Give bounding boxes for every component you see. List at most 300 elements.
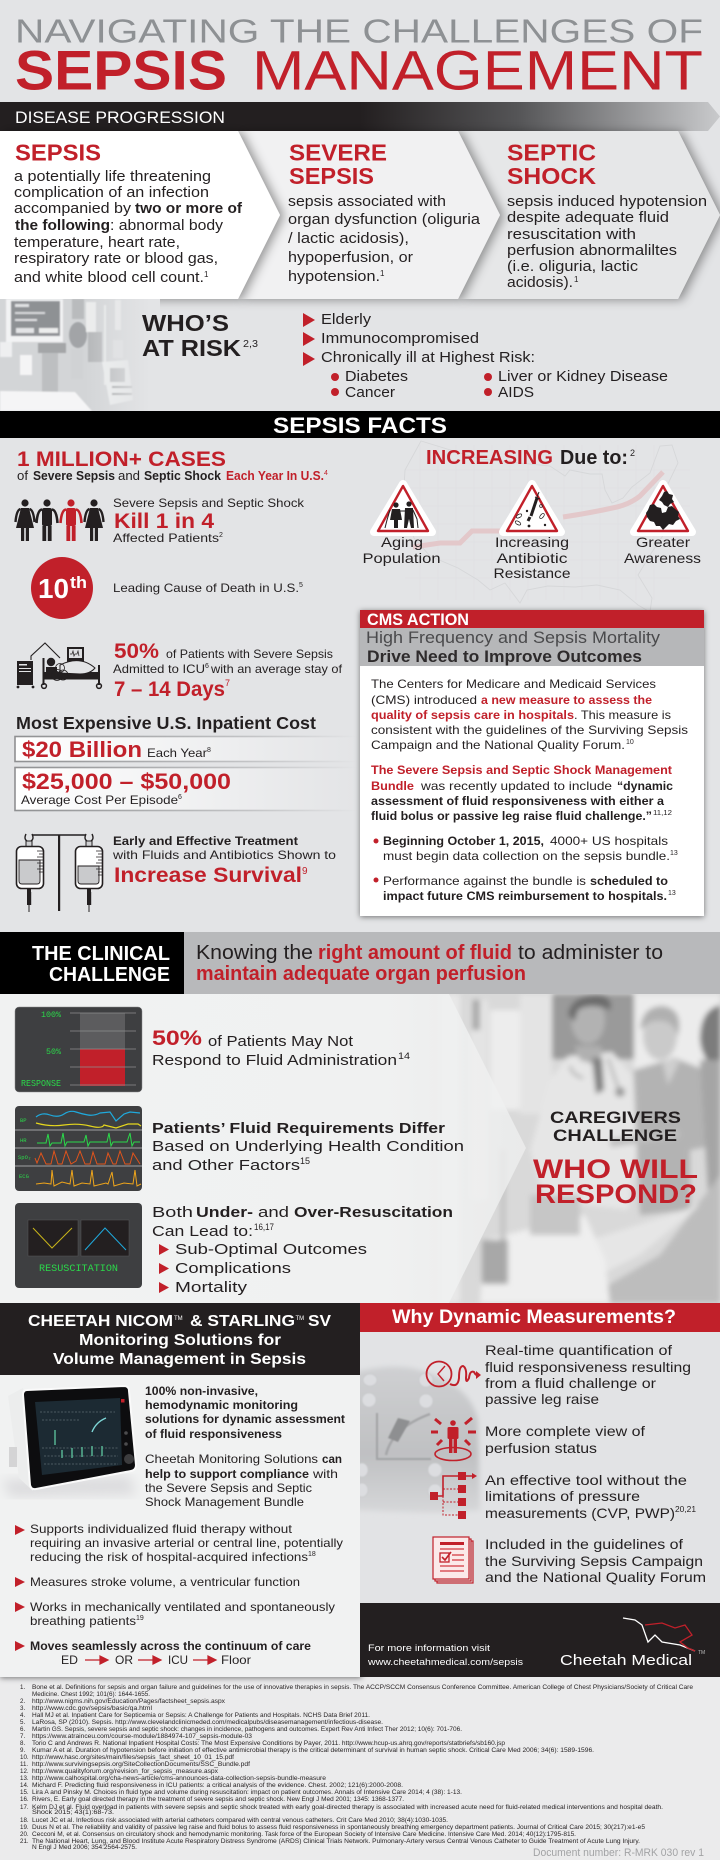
stat: 1 million cases: 4 <box>324 470 328 477</box>
text: under and over resuscitation: Can Lead to: <box>152 1224 253 1240</box>
text: management bundle: was recently updated to include <box>420 779 612 793</box>
text: under and over resuscitation: Under- <box>196 1205 253 1221</box>
heading: cheetah nicom and starling: SV <box>308 1313 331 1330</box>
text: perfusion status <box>485 1423 645 1456</box>
heading: increasing due to <box>426 447 635 469</box>
icon: response monitor <box>15 1007 142 1092</box>
text: management bundle: assessment of fluid responsiveness with either a <box>371 794 664 808</box>
references: 1. <box>20 1684 25 1691</box>
text: pressure limitations <box>485 1472 697 1521</box>
trend line <box>413 472 663 547</box>
text: fluid requirements differ: 15 <box>300 1156 310 1166</box>
references: http://www.calhospital.org/cha-news-article/cms-announces-data-collection-sepsis-bundle-measure <box>32 1775 327 1782</box>
text: under and over resuscitation: Both <box>152 1205 193 1221</box>
references: 13. <box>20 1775 29 1782</box>
list: who's at risk: Chronically ill at Highest Risk: <box>321 350 535 366</box>
icon: decision flow <box>430 1472 477 1519</box>
text: 50 percent may not respond: 14 <box>398 1051 410 1061</box>
icon: resuscitation monitor <box>15 1203 142 1288</box>
text: septic shock description: resuscitation with <box>507 226 636 243</box>
heading bar: the clinical challenge: Knowing the <box>196 942 313 964</box>
subheading: drive need to improve <box>360 628 704 666</box>
text: management bundle: fluid bolus or passive leg raise fluid challenge.” <box>371 809 652 823</box>
heading: severe sepsis: SEVERE <box>289 140 387 166</box>
heading: septic shock: SEPTIC <box>507 140 596 166</box>
text: management bundle: Bundle <box>371 779 414 793</box>
text: management bundle: 11,12 <box>653 810 672 817</box>
list: product benefits <box>15 1522 343 1653</box>
image: faded torso with electrodes <box>360 1366 480 1512</box>
references: 8. <box>20 1740 25 1747</box>
icon: guideline document <box>433 1537 473 1583</box>
heading bar: sepsis facts: SEPSIS FACTS <box>273 413 447 438</box>
icon: warning aging population <box>374 484 432 532</box>
text: severe sepsis description: hypotension. <box>288 268 380 285</box>
icon: vitals monitor <box>15 1106 142 1191</box>
icon: ICU bed <box>17 643 101 688</box>
references: 15. <box>20 1789 29 1796</box>
stat: increase survival: 9 <box>302 866 308 877</box>
list: product benefits: 18 <box>308 1551 316 1558</box>
references: Lucet JC et al. Infectious risk associated with arterial catheters compared with central venous catheters. Crit Care Med 2010; 38(4):1030-1035. <box>32 1817 448 1824</box>
callout: cost per episode: $25,000 – $50,000 <box>22 769 231 794</box>
list: product benefits: Measures stroke volume, a ventricular function <box>30 1575 300 1589</box>
text: septic shock description: despite adequate fluid <box>507 209 669 226</box>
stat: kill 1 in 4: 2 <box>219 532 223 539</box>
references: 7. <box>20 1733 25 1740</box>
logo: cheetah medical: Cheetah Medical <box>560 1652 692 1669</box>
text: included in guidelines: the Surviving Sepsis Campaign <box>485 1553 703 1569</box>
text: support compliance: Shock Management Bundle <box>145 1495 304 1509</box>
stat: 1 million cases: 1 MILLION+ CASES <box>17 448 226 471</box>
text: management bundle: “dynamic <box>617 779 673 793</box>
stat: 50 percent ICU: 7 <box>225 678 230 688</box>
stat: kill 1 in 4: Kill 1 in 4 <box>114 510 214 533</box>
heading bar: the clinical challenge: to administer to <box>518 942 663 964</box>
heading bar: disease progression: DISEASE PROGRESSION <box>15 108 225 127</box>
stat: 1 million cases: Severe Sepsis <box>33 469 115 483</box>
icon: IV bags <box>16 834 102 912</box>
heading bar: disease progression <box>0 102 720 131</box>
references: 19. <box>20 1824 29 1831</box>
label: greater awareness: Awareness <box>624 550 701 566</box>
label: antibiotic resistance: Increasing <box>495 534 569 550</box>
heading: why dynamic measurements: Why Dynamic Measurements? <box>392 1307 676 1328</box>
references: Martin GS. Sepsis, severe sepsis and septic shock: changes in incidence, pathogens and outcomes. Expert Rev Anti Infect Ther 2012; 10(6): 701-706. <box>32 1726 462 1733</box>
text: 50 percent may not respond: of Patients May Not <box>208 1034 353 1050</box>
text: septic shock description: acidosis). <box>507 274 573 291</box>
stat: increase survival: with Fluids and Antibiotics Shown to <box>112 848 336 862</box>
list: who's at risk: Immunocompromised <box>321 331 479 347</box>
heading bar: the clinical challenge: CHALLENGE <box>49 964 170 986</box>
callout: 20 billion: 8 <box>207 747 211 754</box>
heading: caregivers challenge <box>533 1108 698 1209</box>
text: septic shock description: sepsis induced hypotension <box>507 193 707 210</box>
references: Medicine. Chest 1992; 101(6): 1644-1655. <box>32 1691 150 1698</box>
list: product benefits: 19 <box>136 1615 144 1622</box>
list: CMS bullets: must begin data collection on the sepsis bundle. <box>383 849 670 863</box>
heading: caregivers challenge: CHALLENGE <box>553 1126 677 1145</box>
heading: CMS action: CMS ACTION <box>367 610 469 629</box>
stat: 50 percent ICU <box>113 640 343 701</box>
heading bar: the clinical challenge <box>0 932 720 994</box>
label: aging population: Aging <box>381 534 423 550</box>
references: Michard F. Predicting fluid responsiveness in ICU patients: a critical analysis of the evidence. Chest. 2002; 121(6):2000-2008. <box>32 1782 403 1789</box>
list: CMS bullets <box>374 834 678 903</box>
panel: CMS action <box>360 610 704 916</box>
text: under and over resuscitation: 16,17 <box>254 1222 274 1232</box>
flow: ED to OR to ICU to floor <box>61 1653 251 1667</box>
photo: caregivers <box>460 994 720 1303</box>
heading: inpatient cost: Most Expensive U.S. Inpatient Cost <box>16 713 316 733</box>
text: support compliance <box>145 1452 342 1509</box>
text: under and over resuscitation: Complications <box>175 1261 291 1277</box>
references: 20. <box>20 1831 29 1838</box>
references: Shock 2015; 43(1):68-73. <box>32 1809 114 1816</box>
text: real-time quantification: Real-time quantification of <box>485 1342 672 1358</box>
stat: 1 million cases: and <box>118 469 140 483</box>
list: CMS bullets: Beginning October 1, 2015, <box>383 834 544 848</box>
list: who's at risk: AIDS <box>498 385 534 401</box>
heading: septic shock <box>507 140 596 189</box>
callout: 20 billion <box>15 736 357 762</box>
references: Torio C and Andrews R. National Inpatient Hospital Costs: The Most Expensive Conditions by Payer, 2011. http://www.hcup-us.ahrq.gov/reports/statbriefs/sb160.jsp <box>32 1740 506 1747</box>
text: under and over resuscitation: Mortality <box>175 1280 248 1296</box>
text: new measure: quality of sepsis care in hospitals <box>371 708 574 722</box>
text: sepsis definition: : abnormal body <box>110 217 224 234</box>
text: sepsis definition <box>14 168 243 286</box>
heading: caregivers challenge: CAREGIVERS <box>550 1108 681 1127</box>
icon: response monitor: RESPONSE <box>21 1078 61 1089</box>
text: 50 percent may not respond <box>152 1027 410 1069</box>
heading: cheetah nicom and starling <box>0 1303 360 1375</box>
text: septic shock description <box>507 193 707 291</box>
list: product benefits: breathing patients <box>30 1614 136 1628</box>
text: pressure limitations: limitations of pressure <box>485 1488 640 1504</box>
map: US outline with grid <box>403 441 690 612</box>
references: LaRosa, SP (2010). Sepsis. http://www.clevelandclinicmeded.com/medicalpubs/diseasemanagement/infectious-disease. <box>32 1719 383 1726</box>
text: included in guidelines: Included in the guidelines of <box>485 1536 683 1552</box>
text: support compliance: can <box>322 1452 342 1466</box>
text: septic shock description: 1 <box>574 275 579 284</box>
list: CMS bullets: Performance against the bundle is <box>383 874 586 888</box>
text: leading cause of death: Leading Cause of Death in U.S. <box>113 581 299 595</box>
icon: 10th badge: 10 <box>38 573 69 604</box>
references: http://www.nigms.nih.gov/Education/Pages/factsheet_sepsis.aspx <box>32 1698 226 1705</box>
logo: cheetah medical: TM <box>698 1650 705 1656</box>
references: N Engl J Med 2006; 354:2564-2575. <box>32 1844 137 1851</box>
callout: cost per episode: Average Cost Per Episode <box>21 793 178 807</box>
stat: kill 1 in 4: Severe Sepsis and Septic Shock <box>113 496 305 510</box>
text: new measure: consistent with the guidelines of the Surviving Sepsis <box>371 723 688 737</box>
text: severe sepsis description <box>288 193 481 285</box>
stat: kill 1 in 4: Affected Patients <box>113 531 219 545</box>
text: sepsis definition: the following <box>15 217 110 234</box>
label: aging population <box>362 534 440 566</box>
text: new measure: . This measure is <box>574 708 671 722</box>
text: new measure: a new measure to assess the <box>481 693 652 707</box>
list: who's at risk: Cancer <box>345 385 395 401</box>
flow: ED to OR to ICU to floor: Floor <box>221 1653 251 1667</box>
text: sepsis definition: respiratory rate or blood gas, <box>14 250 218 267</box>
text: non-invasive solutions: 100% non-invasive, <box>145 1384 258 1398</box>
icon: four people, one red <box>16 499 104 541</box>
text: real-time quantification: fluid responsiveness resulting <box>485 1359 691 1375</box>
icon: response monitor: 50% <box>46 1048 61 1057</box>
text: support compliance: help to support compliance <box>145 1467 309 1481</box>
heading bar: the clinical challenge: THE CLINICAL <box>32 943 170 965</box>
references: 6. <box>20 1726 25 1733</box>
list: CMS bullets: 13 <box>668 890 676 897</box>
logo: cheetah medical <box>560 1618 705 1669</box>
text: more information: www.cheetahmedical.com/sepsis <box>367 1657 523 1668</box>
icon: person with arrows <box>431 1418 476 1460</box>
footer: contact and logo <box>360 1603 720 1677</box>
list: who's at risk: Liver or Kidney Disease <box>498 369 668 385</box>
title <box>15 13 703 101</box>
heading: cheetah nicom and starling: Monitoring Solutions for <box>79 1332 281 1349</box>
text: new measure: The Centers for Medicare and Medicaid Services <box>371 677 656 691</box>
text: support compliance: with <box>312 1467 338 1481</box>
text: included in guidelines <box>485 1536 706 1585</box>
heading: caregivers challenge: WHO WILL <box>533 1154 698 1184</box>
text: under and over resuscitation: Sub-Optimal Outcomes <box>175 1242 367 1258</box>
text: new measure: Campaign and the National Quality Forum. <box>371 738 625 752</box>
references: https://www.atrainceu.com/course-module/1884974-107_sepsis-module-03 <box>32 1733 253 1740</box>
references: Rivers, E. Early goal directed therapy in the treatment of severe sepsis and septic shock. New Engl J Med 2001; 1345: 1368-1377. <box>32 1796 404 1803</box>
references: 14. <box>20 1782 29 1789</box>
text: new measure <box>371 677 688 752</box>
heading: increasing due to: Due to: <box>560 447 628 469</box>
text: more information: For more information visit <box>368 1643 490 1654</box>
stat: increase survival: Early and Effective Treatment <box>113 834 298 848</box>
subheading: drive need to improve: High Frequency and Sepsis Mortality <box>366 628 661 647</box>
references: Hall MJ et al. Inpatient Care for Septicemia or Sepsis: A Challenge for Patients and Hospitals. NCHS Data Brief 2011. <box>32 1712 370 1719</box>
list: who's at risk <box>303 312 668 401</box>
flow: ED to OR to ICU to floor: ICU <box>168 1653 188 1667</box>
text: management bundle <box>371 763 673 823</box>
list: product benefits: reducing the risk of hospital-acquired infections <box>30 1550 308 1564</box>
callout: cost per episode: 6 <box>178 794 182 801</box>
heading: who's at risk: 2,3 <box>243 338 258 350</box>
text: perfusion status: More complete view of <box>485 1423 645 1439</box>
title: NAVIGATING THE CHALLENGES OF <box>15 13 703 50</box>
list: who's at risk: Elderly <box>321 312 372 328</box>
heading: CMS action <box>360 610 704 629</box>
text: sepsis definition: temperature, heart rate, <box>14 234 180 251</box>
references: Cecconi M, et al. Consensus on circulatory shock and hemodynamic monitoring. Task force of the European Society of Intensive Care Medicine. Intensive Care Med. 2014; 40(12):1795-815. <box>32 1831 576 1838</box>
references: http://www.cdc.gov/sepsis/basic/qa.html <box>32 1705 152 1712</box>
label: greater awareness <box>624 534 701 566</box>
references <box>20 1684 694 1851</box>
icon: clock with wave <box>426 1362 481 1386</box>
text: 50 percent may not respond: Respond to Fluid Administration <box>152 1053 397 1069</box>
text: real-time quantification: from a fluid challenge or <box>485 1375 656 1391</box>
heading: who's at risk <box>142 310 258 361</box>
text: real-time quantification: passive leg raise <box>485 1391 599 1407</box>
icon: 10th badge <box>31 557 93 619</box>
text: fluid requirements differ: Based on Underlying Health Condition <box>152 1139 464 1155</box>
stat: 50 percent ICU: of Patients with Severe Sepsis <box>166 647 333 661</box>
references: The National Heart, Lung, and Blood Institute Acute Respiratory Distress Syndrome (ARDS) Clinical Trials Network. Pulmonary-Artery versus Central Venous Catheter to Guide Treatment of Acute Lung Injury. <box>32 1838 640 1845</box>
text: support compliance: the Severe Sepsis and Septic <box>145 1481 312 1495</box>
text: non-invasive solutions: solutions for dynamic assessment <box>145 1412 345 1426</box>
heading bar: the clinical challenge: right amount of fluid <box>318 942 512 964</box>
text: septic shock description: perfusion abnormaliltes <box>507 242 677 259</box>
references: 5. <box>20 1719 25 1726</box>
panel: severe sepsis chevron <box>238 131 500 299</box>
text: under and over resuscitation <box>152 1205 453 1296</box>
heading: caregivers challenge: RESPOND? <box>535 1179 697 1209</box>
list: product benefits: requiring an invasive arterial or central line, potentially <box>30 1536 343 1550</box>
text: fluid requirements differ <box>152 1121 464 1174</box>
image: monitor device <box>2 1386 136 1497</box>
references: 16. <box>20 1796 29 1803</box>
list: CMS bullets: 4000+ US hospitals <box>550 834 668 848</box>
text: non-invasive solutions: hemodynamic monitoring <box>145 1398 298 1412</box>
text: sepsis definition: and white blood cell count. <box>14 269 204 286</box>
stat: 50 percent ICU: with an average stay of <box>210 662 343 676</box>
stat: 1 million cases <box>17 448 328 483</box>
icon: vitals monitor: SpO₂ <box>18 1154 31 1161</box>
stat: kill 1 in 4 <box>113 496 305 545</box>
text: support compliance: Cheetah Monitoring Solutions <box>145 1452 318 1466</box>
stat: 50 percent ICU: 50% <box>114 640 159 663</box>
list: CMS bullets: impact future CMS reimbursement to hospitals. <box>383 889 667 903</box>
icon: response monitor: 100% <box>41 1011 61 1020</box>
references: http://www.survivingsepsis.org/SiteCollectionDocuments/SSC_Bundle.pdf <box>32 1761 250 1768</box>
stat: increase survival: Increase Survival <box>114 864 302 887</box>
subheading: drive need to improve: Drive Need to Improve Outcomes <box>367 647 642 666</box>
references: Kumar A et al. Duration of hypotension before initiation of effective antimicrobial therapy is the critical determinant of survival in human septic shock. Critical Care Med 2006; 34(6): 1589-1596. <box>32 1747 594 1754</box>
heading bar: the clinical challenge: maintain adequate organ perfusion <box>196 963 526 985</box>
panel: clinical challenge left <box>0 994 526 1303</box>
label: aging population: Population <box>362 550 440 566</box>
text: severe sepsis description: / lactic acidosis), <box>288 230 409 247</box>
list: who's at risk: Diabetes <box>345 369 408 385</box>
heading bar: sepsis facts <box>0 411 720 438</box>
references: Bone et al. Definitions for sepsis and organ failure and guidelines for the use of innovative therapies in sepsis. The ACCP/SCCM Consensus Conference Committee. American College of Chest Physicians/Society of Critical Care <box>32 1684 694 1691</box>
heading: increasing due to: INCREASING <box>426 447 553 469</box>
title: MANAGEMENT <box>252 38 703 102</box>
references: 21. <box>20 1838 29 1845</box>
list: product benefits: Supports individualized fluid therapy without <box>30 1522 293 1536</box>
list: CMS bullets: scheduled to <box>590 874 668 888</box>
references: 4. <box>20 1712 25 1719</box>
text: severe sepsis description: sepsis associated with <box>288 193 446 210</box>
heading: septic shock: SHOCK <box>507 163 596 189</box>
stat: 1 million cases: Each Year In U.S. <box>226 469 324 483</box>
text: real-time quantification <box>485 1342 691 1407</box>
flow: ED to OR to ICU to floor: ED <box>61 1653 78 1667</box>
references: 9. <box>20 1747 25 1754</box>
heading: who's at risk: AT RISK <box>142 335 241 361</box>
heading: cheetah nicom and starling: CHEETAH NICOM <box>28 1313 173 1330</box>
text: leading cause of death: 5 <box>299 582 303 589</box>
icon: warning antibiotic resistance <box>503 484 561 532</box>
heading: why dynamic measurements <box>360 1303 720 1332</box>
list: product benefits: Works in mechanically ventilated and spontaneously <box>30 1600 335 1614</box>
heading: severe sepsis <box>289 140 387 189</box>
references: 18. <box>20 1817 29 1824</box>
icon: warning greater awareness <box>634 484 692 532</box>
panel: why dynamic measurements <box>345 1303 720 1603</box>
text: non-invasive solutions <box>145 1384 345 1441</box>
text: perfusion status: perfusion status <box>485 1440 597 1456</box>
text: sepsis definition: two or more of <box>135 200 243 217</box>
text: sepsis definition: accompanied by <box>14 200 132 217</box>
text: more information <box>367 1643 523 1668</box>
text: fluid requirements differ: Patients’ Fluid Requirements Differ <box>152 1121 445 1137</box>
label: antibiotic resistance <box>494 534 571 581</box>
stat: 50 percent ICU: 6 <box>205 663 209 670</box>
text: new measure: (CMS) introduced <box>371 693 477 707</box>
references: Kelm DJ et al. Fluid overload in patients with severe sepsis and septic shock treated with early goal-directed therapy is associated with increased acute need for fluid-related medical interventions and hospital death. <box>32 1804 663 1811</box>
text: pressure limitations: An effective tool without the <box>485 1472 687 1488</box>
text: included in guidelines: and the National Quality Forum <box>485 1569 706 1585</box>
stat: 50 percent ICU: Admitted to ICU <box>113 662 205 676</box>
callout: 20 billion: $20 Billion <box>22 737 142 762</box>
text: severe sepsis description: 1 <box>380 269 385 278</box>
panel: septic shock chevron <box>458 131 720 299</box>
heading: sepsis: SEPSIS <box>15 140 101 166</box>
references: 2. <box>20 1698 25 1705</box>
photo: faded hospital equipment <box>0 299 160 411</box>
references: 17. <box>20 1804 29 1811</box>
heading: cheetah nicom and starling: TM <box>296 1316 304 1322</box>
text: sepsis definition: a potentially life threatening <box>14 168 211 185</box>
label: antibiotic resistance: Resistance <box>494 565 571 581</box>
stat: 1 million cases: Septic Shock <box>144 469 221 483</box>
icon: vitals monitor: HR <box>20 1137 27 1144</box>
icon: vitals monitor: ECG <box>19 1173 29 1180</box>
references: Duus N et al. The reliability and validity of passive leg raise and fluid bolus to assess fluid responsiveness in spontaneously breathing emergency department patients. Journal of Critical Care 2015; 30(217):e1-e5 <box>32 1824 646 1831</box>
heading: cheetah nicom and starling: Volume Management in Sepsis <box>53 1351 306 1368</box>
heading: severe sepsis: SEPSIS <box>289 163 374 189</box>
heading: who's at risk: WHO’S <box>142 310 229 336</box>
stat: increase survival <box>112 834 336 887</box>
references: 11. <box>20 1761 28 1768</box>
references: http://www.qualityforum.org/revision_for_sepsis_measure.aspx <box>32 1768 219 1775</box>
icon: resuscitation monitor: RESUSCITATION <box>39 1264 118 1275</box>
text: sepsis definition: 1 <box>204 270 209 279</box>
title: SEPSIS <box>15 38 227 102</box>
callout: 20 billion: Each Year <box>147 746 207 760</box>
heading: increasing due to: 2 <box>630 448 635 458</box>
references: 10. <box>20 1754 29 1761</box>
stat: 50 percent ICU: 7 – 14 Days <box>114 678 225 701</box>
icon: vitals monitor: BP <box>20 1117 27 1124</box>
text: under and over resuscitation: Over-Resuscitation <box>294 1205 453 1221</box>
document number: Document number: R-MRK 030 rev 1 <box>533 1847 704 1859</box>
text: severe sepsis description: hypoperfusion, or <box>288 249 413 266</box>
text: sepsis definition: complication of an infection <box>14 184 209 201</box>
list: product benefits: Moves seamlessly across the continuum of care <box>30 1639 311 1653</box>
text: non-invasive solutions: of fluid responsiveness <box>145 1427 282 1441</box>
label: antibiotic resistance: Antibiotic <box>496 550 568 566</box>
flow: ED to OR to ICU to floor: OR <box>115 1653 133 1667</box>
callout: cost per episode <box>15 768 357 810</box>
heading: cheetah nicom and starling: TM <box>174 1316 183 1322</box>
text: 50 percent may not respond: 50% <box>152 1027 202 1050</box>
label: greater awareness: Greater <box>636 534 690 550</box>
text: management bundle: The Severe Sepsis and Septic Shock Management <box>371 763 672 777</box>
text: pressure limitations: measurements (CVP, PWP) <box>485 1505 675 1521</box>
panel: cheetah monitoring solutions <box>0 1303 362 1677</box>
list: CMS bullets: 13 <box>670 850 678 857</box>
references: 3. <box>20 1705 25 1712</box>
text: new measure: 10 <box>626 739 634 746</box>
